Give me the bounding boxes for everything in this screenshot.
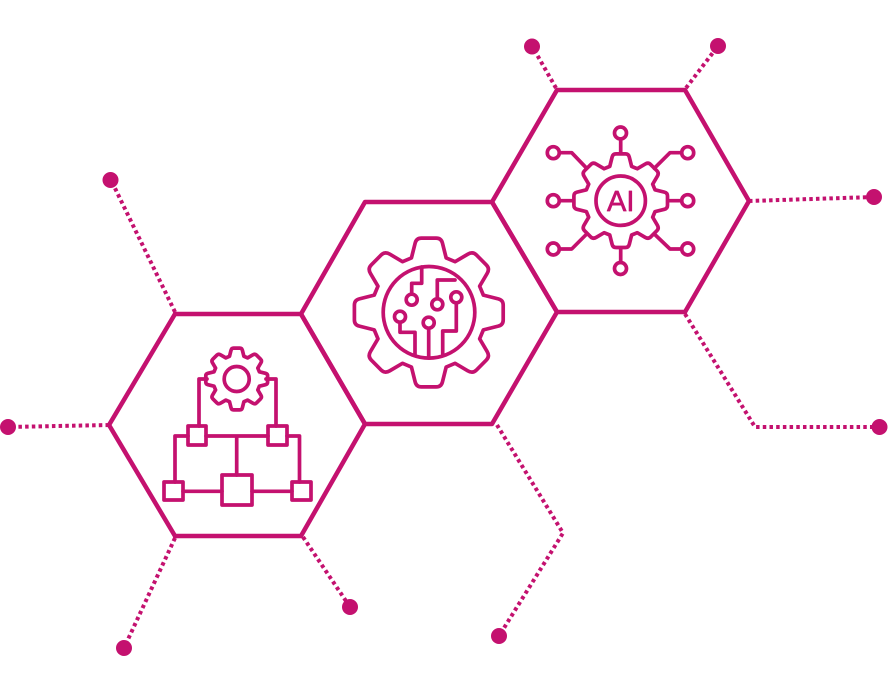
node connectors bbox=[560, 139, 681, 262]
gear bbox=[574, 154, 668, 248]
connector: far left callout bbox=[0, 419, 109, 435]
connector: lower callout bbox=[303, 537, 358, 615]
centre ring bbox=[596, 176, 645, 225]
AI label: AI bbox=[607, 186, 634, 218]
circuit traces bbox=[400, 267, 456, 357]
flowchart boxes bbox=[164, 426, 311, 505]
hexagon: right bbox=[492, 90, 749, 312]
hexagon: middle bbox=[301, 202, 557, 424]
connector: right elbow callout bbox=[685, 314, 888, 435]
icon: AI gear with nodes bbox=[547, 127, 694, 274]
large gear bbox=[354, 238, 503, 387]
connector: lower left callout bbox=[116, 538, 175, 656]
hexagon: left bbox=[109, 314, 365, 536]
gear bbox=[206, 348, 268, 410]
circuit nodes bbox=[406, 294, 417, 305]
icon: gear with circuit bbox=[354, 238, 503, 387]
connector: top left callout bbox=[524, 38, 556, 88]
connector: far right callout bbox=[749, 189, 882, 205]
circuit ring bbox=[383, 266, 475, 358]
gear hub bbox=[224, 366, 249, 392]
flowchart connectors bbox=[175, 379, 300, 491]
connector: bottom centre elbow callout bbox=[491, 425, 563, 644]
connector: top right callout bbox=[686, 38, 726, 88]
nodes bbox=[614, 127, 626, 139]
connector: upper left callout bbox=[102, 172, 175, 312]
icon: gear with flowchart bbox=[164, 348, 311, 505]
